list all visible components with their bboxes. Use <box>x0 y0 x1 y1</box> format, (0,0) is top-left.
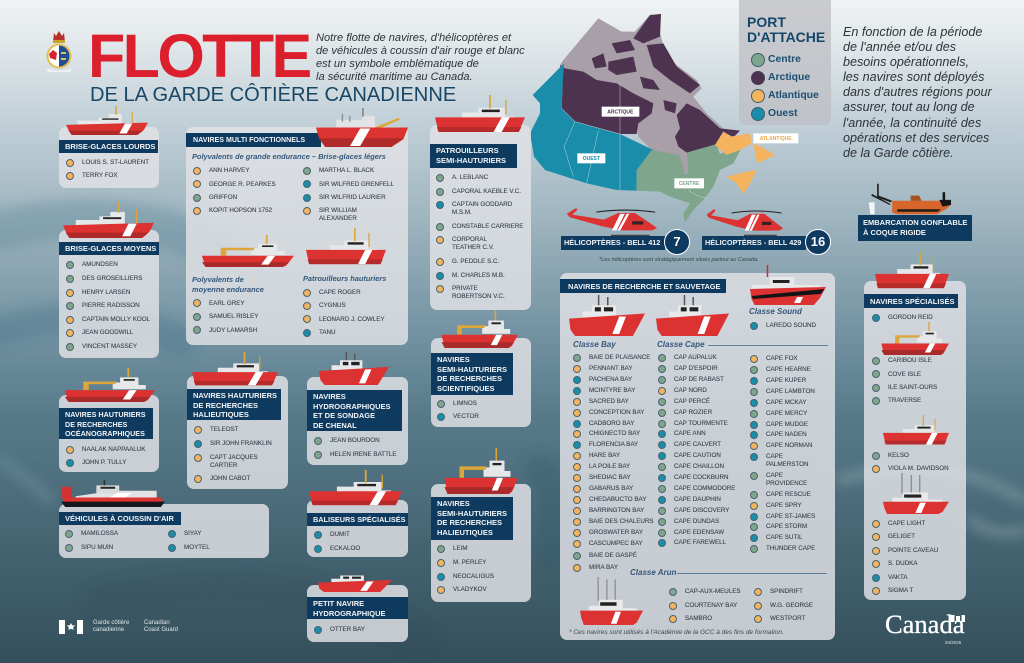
heading <box>186 133 321 147</box>
panel: navires multi fonctionnels: JUDY LAMARSH <box>209 326 257 334</box>
heading <box>864 294 958 308</box>
heading <box>430 144 517 168</box>
panel: navires de recherche et sauvetage: CHIGNECTO BAY <box>589 430 640 437</box>
deployment text: dans d'autres régions pour <box>843 85 992 99</box>
subheading: classe arun: Classe Arun <box>630 568 676 577</box>
panel: navires spécialisés <box>864 281 966 600</box>
panel: navires de recherche et sauvetage: CAPE DISCOVERY <box>674 507 729 514</box>
panel: navires de recherche et sauvetage: CAPE MUDGE <box>766 421 808 428</box>
panel: navires multi fonctionnels: GRIFFON <box>209 194 237 201</box>
panel: navires de recherche et sauvetage: CAPE FOX <box>766 355 798 362</box>
panel: navires hauturiers de recherches halieutiques: SIR JOHN FRANKLIN <box>210 440 272 447</box>
panel: navires de recherche et sauvetage: CAPE DUNDAS <box>674 518 719 525</box>
panel: semi-hauturiers de recherches scientifiques: VECTOR <box>453 413 479 420</box>
panel: patrouilleurs semi-hauturiers: CAPTAIN GODDARD <box>452 201 512 208</box>
panel: navires de recherche et sauvetage: PROVIDENCE <box>766 480 807 487</box>
panel: navires spécialisés: POINTE CAVEAU <box>888 547 938 554</box>
panel: patrouilleurs semi-hauturiers: CORPORAL <box>452 236 487 243</box>
legend item: centre: Centre <box>768 54 801 65</box>
subheading: grande endurance: Polyvalents de grande endurance – Brise-glaces légers <box>192 152 386 161</box>
count: 7 <box>664 229 690 255</box>
panel: navires spécialisés: VIOLA M. DAVIDSON <box>888 465 949 472</box>
heading: HYDROGRAPHIQUE <box>313 609 386 618</box>
panel: patrouilleurs semi-hauturiers: A. LEBLANC <box>452 174 488 181</box>
panel: navires de recherche et sauvetage: CAPE MERCY <box>766 410 807 417</box>
panel: patrouilleurs semi-hauturiers: CAPORAL KAEBLE V.C. <box>452 188 521 195</box>
ship: specialized 4 <box>883 473 949 514</box>
panel: navires de recherche et sauvetage: THUNDER CAPE <box>766 545 815 552</box>
panel: semi-hauturiers de recherches halieutiques: LEIM <box>453 545 468 552</box>
panel: navires multi fonctionnels: ANN HARVEY <box>209 167 250 174</box>
heading: NAVIRES <box>437 355 470 364</box>
label: embarcation gonflable: EMBARCATION GONFLABLE <box>863 218 967 227</box>
ship: scientific research <box>442 310 518 348</box>
footer: coast guard: Coast Guard <box>144 627 178 633</box>
panel: navires multi fonctionnels: LEONARD J. COWLEY <box>319 316 385 322</box>
label: centre: CENTRE <box>679 181 700 187</box>
helicopter footnote: *Les hélicoptères sont stratégiquement situés partout au Canada. <box>599 257 759 263</box>
heading: SEMI-HAUTURIERS <box>437 365 507 374</box>
panel: brise-glaces moyens: HENRY LARSEN <box>82 289 130 296</box>
panel: véhicules à coussin d'air: SIYAY <box>184 530 201 537</box>
panel: navires multi fonctionnels: CYGNUS <box>319 302 346 309</box>
intro text: Notre flotte de navires, d'hélicoptères et <box>316 32 511 44</box>
legend item: arctique <box>751 71 810 85</box>
panel: navires de recherche et sauvetage: CASCUMPEC BAY <box>589 540 643 547</box>
label: ouest: OUEST <box>583 156 600 162</box>
panel: baliseurs spécialisés: DUMIT <box>330 531 350 538</box>
panel: patrouilleurs semi-hauturiers: M.S.M. <box>452 209 472 216</box>
panel: navires spécialisés: COVE ISLE <box>888 370 921 378</box>
panel: patrouilleurs semi-hauturiers: CONSTABLE CARRIERE <box>452 223 523 230</box>
panel: navires hydrographiques <box>307 377 408 465</box>
legend item: arctique: Arctique <box>768 72 810 83</box>
heading: ET DE SONDAGE <box>313 411 375 420</box>
panel: navires spécialisés: S. DUDKA <box>888 560 918 567</box>
panel: navires hauturiers océanographiques: JOHN P. TULLY <box>82 459 126 466</box>
ship: specialized 1 <box>875 252 949 288</box>
panel: baliseurs spécialisés: ECKALOO <box>330 545 360 552</box>
panel: véhicules à coussin d'air: MOYTEL <box>184 544 210 551</box>
ship: hydrographic <box>319 352 389 385</box>
subheading: classe cape: Classe Cape <box>657 340 705 349</box>
panel: petit navire hydrographique <box>307 585 408 642</box>
panel: navires de recherche et sauvetage: FLORENCIA BAY <box>589 441 638 448</box>
ship: bay class <box>569 295 645 336</box>
panel: navires de recherche et sauvetage: CAPE HEARNE <box>766 366 811 373</box>
panel: navires de recherche et sauvetage: CAPE CALVERT <box>674 441 721 448</box>
panel: navires spécialisés: CARIBOU ISLE <box>888 357 932 364</box>
panel: navires multi fonctionnels: SIR WILLIAM <box>319 207 357 214</box>
panel: navires de recherche et sauvetage: CAPE MCKAY <box>766 399 807 406</box>
panel: navires de recherche et sauvetage: CAP DE RABAST <box>674 376 724 383</box>
ship: multi-purpose <box>316 108 408 147</box>
ship: heavy icebreaker <box>66 106 148 135</box>
panel: port d'attache legend <box>739 0 831 125</box>
panel: navires de recherche et sauvetage: COURTENAY BAY <box>685 602 737 609</box>
label: embarcation gonflable <box>858 215 972 241</box>
ship: small hydrographic <box>318 570 392 592</box>
footer: coast guard: Canadian <box>144 620 170 626</box>
panel: navires de recherche et sauvetage: CAPE STORM <box>766 523 807 530</box>
panel: navires de recherche et sauvetage: CADBORO BAY <box>589 420 634 427</box>
panel: navires spécialisés: GELIGET <box>888 533 915 540</box>
panel: navires de recherche et sauvetage: CAP NORD <box>674 387 707 394</box>
panel: patrouilleurs semi-hauturiers: TEATHER C.V. <box>452 244 494 251</box>
legend item: centre <box>751 53 801 67</box>
panel: brise-glaces lourds: LOUIS S. ST-LAURENT <box>82 159 149 166</box>
panel: navires de recherche et sauvetage: CAP AUPALUK <box>674 354 717 361</box>
panel: semi-hauturiers de recherches halieutiques: M. PERLEY <box>453 559 486 566</box>
panel: petit navire hydrographique: OTTER BAY <box>330 626 365 633</box>
heading <box>187 389 281 420</box>
panel: navires spécialisés: KELSO <box>888 452 909 459</box>
panel: navires multi fonctionnels <box>186 127 408 345</box>
label: embarcation gonflable: À COQUE RIGIDE <box>863 228 926 237</box>
heading: BRISE-GLACES LOURDS <box>65 142 155 151</box>
heading: DE RECHERCHES <box>65 420 127 429</box>
panel: semi-hauturiers de recherches scientifiques <box>431 338 531 427</box>
panel: navires de recherche et sauvetage: LAREDO SOUND <box>766 322 816 329</box>
panel: navires spécialisés: CAPE LIGHT <box>888 520 925 527</box>
panel: navires de recherche et sauvetage: CAPE DAUPHIN <box>674 496 721 503</box>
label: atlantique <box>753 133 798 143</box>
subtitle: DE LA GARDE CÔTIÈRE CANADIENNE <box>90 84 456 106</box>
panel: navires hauturiers de recherches halieutiques: CARTIER <box>210 462 237 469</box>
panel: navires de recherche et sauvetage: HARE BAY <box>589 452 620 459</box>
deployment text: les navires sont déployés <box>843 70 984 84</box>
panel: semi-hauturiers de recherches halieutiques <box>431 484 531 602</box>
panel: navires de recherche et sauvetage: PENNANT BAY <box>589 365 633 372</box>
deployment text: de l'année et/ou des <box>843 40 956 54</box>
panel: navires multi fonctionnels: ALEXANDER <box>319 215 357 222</box>
heading <box>307 597 408 619</box>
panel: navires spécialisés: VAKTA <box>888 574 908 581</box>
panel: navires de recherche et sauvetage: LA POILE BAY <box>589 463 630 470</box>
heading <box>307 513 408 526</box>
panel: navires de recherche et sauvetage: GABARUS BAY <box>589 485 633 492</box>
panel: brise-glaces lourds <box>59 127 159 188</box>
panel: baliseurs spécialisés <box>307 500 408 557</box>
ship: specialized 2 <box>881 322 949 355</box>
count: 7: 7 <box>673 234 681 249</box>
panel: brise-glaces moyens: JEAN GOODWILL <box>82 329 133 336</box>
deployment text: assurer, tout au long de <box>843 100 975 114</box>
panel: brise-glaces moyens: DES GROSEILLIERS <box>82 275 142 282</box>
heading: NAVIRES HAUTURIERS <box>65 410 146 419</box>
panel: navires hauturiers de recherches halieutiques: CAPT JACQUES <box>210 454 258 461</box>
deployment text: besoins opérationnels, <box>843 55 969 69</box>
panel: navires de recherche et sauvetage: CHEDABUCTO BAY <box>589 496 646 503</box>
legend item: atlantique <box>751 89 819 103</box>
map of Canada <box>530 14 798 222</box>
heading: NAVIRES <box>313 392 346 401</box>
legend heading: D'ATTACHE <box>747 28 825 44</box>
title: FLOTTE <box>88 22 310 90</box>
heading: DE RECHERCHES <box>437 518 502 527</box>
heading: PATROUILLEURS <box>436 146 499 155</box>
panel: véhicules à coussin d'air: SIPU MUIN <box>81 544 113 551</box>
panel: navires de recherche et sauvetage: CAP TOURMENTE <box>674 420 728 427</box>
panel: navires multi fonctionnels: EARL GREY <box>209 300 245 306</box>
ship: medium icebreaker <box>63 202 154 238</box>
panel: patrouilleurs semi-hauturiers: G. PEDDLE S.C. <box>452 258 499 265</box>
footer: government flag signature <box>59 620 83 634</box>
heading: PETIT NAVIRE <box>313 599 364 608</box>
heading <box>560 279 726 293</box>
panel: navires de recherche et sauvetage: BAIE DES CHALEURS <box>589 518 654 525</box>
ship: hovercraft <box>61 480 165 507</box>
panel: navires de recherche et sauvetage: CAP D'ESPOIR <box>674 365 718 372</box>
panel: navires de recherche et sauvetage: SACRED BAY <box>589 398 629 405</box>
panel: brise-glaces moyens: AMUNDSEN <box>82 261 118 268</box>
ship: semi-offshore fisheries <box>444 448 518 494</box>
panel: navires hauturiers océanographiques <box>59 395 159 472</box>
subheading: patrouilleurs hauturiers: Patrouilleurs hauturiers <box>303 274 386 283</box>
deployment text: de la Garde côtière. <box>843 146 954 160</box>
panel: navires de recherche et sauvetage: BAIE DE PLAISANCE <box>589 354 650 361</box>
panel: navires de recherche et sauvetage: CAPE RESCUE <box>766 491 811 498</box>
panel: navires spécialisés: GORDON REID <box>888 314 933 321</box>
panel: navires de recherche et sauvetage: CAPE NORMAN <box>766 442 813 449</box>
heading <box>59 512 181 525</box>
panel: navires hauturiers de recherches halieutiques <box>187 376 288 489</box>
panel: navires hauturiers de recherches halieutiques: TELEOST <box>210 426 238 433</box>
heading <box>59 408 153 439</box>
panel: navires spécialisés: SIGMA T <box>888 587 913 594</box>
icon: coast guard crest <box>46 31 72 72</box>
deployment text: l'année, la continuité des <box>843 116 981 130</box>
intro text: de véhicules à coussin d'air rouge et blanc <box>316 45 525 57</box>
ship: specialized 3 <box>883 415 949 444</box>
panel: navires multi fonctionnels: SAMUEL RISLEY <box>209 313 258 320</box>
subheading: moyenne endurance: moyenne endurance <box>192 285 264 294</box>
panel: navires de recherche et sauvetage: MCINTYRE BAY <box>589 387 635 394</box>
footer: garde côtière: Garde côtière <box>93 620 129 626</box>
panel: semi-hauturiers de recherches halieutiques: NEOCALIGUS <box>453 573 494 580</box>
panel: navires de recherche et sauvetage: PACHENA BAY <box>589 376 632 383</box>
footer: wordmark flag <box>951 615 965 622</box>
heading: SEMI-HAUTURIERS <box>436 156 506 165</box>
ship: offshore patrol <box>306 228 386 264</box>
panel: navires multi fonctionnels: SIR WILFRID LAURIER <box>319 194 386 201</box>
panel: navires de recherche et sauvetage: CAPE COCKBURN <box>674 474 729 481</box>
heading: DE CHENAL <box>313 421 357 430</box>
ship: sound class <box>750 265 826 305</box>
footer: coast guard <box>144 620 178 633</box>
panel: navires de recherche et sauvetage: CAPE CHAILLON <box>674 463 724 470</box>
panel: navires de recherche et sauvetage: SPINDRIFT <box>770 588 803 595</box>
panel: navires hydrographiques: HELEN IRENE BATTLE <box>330 451 397 458</box>
label: helicopters bell 412: HÉLICOPTÈRES - BELL 412 <box>564 238 660 247</box>
heading <box>307 390 402 431</box>
panel: semi-hauturiers de recherches scientifiques: LIMNOS <box>453 400 477 407</box>
panel: navires de recherche et sauvetage: CAPE SUTIL <box>766 534 802 541</box>
panel: navires de recherche et sauvetage: CAPE KUPER <box>766 377 806 384</box>
heading <box>431 497 513 540</box>
panel: navires de recherche et sauvetage: MIRA BAY <box>589 564 618 571</box>
label: ouest <box>577 153 605 163</box>
panel: navires de recherche et sauvetage: GROSWATER BAY <box>589 529 643 536</box>
heading: DE RECHERCHES <box>437 374 502 383</box>
legend item: ouest: Ouest <box>768 108 797 119</box>
label: arctique: ARCTIQUE <box>607 109 634 115</box>
heading: HALIEUTIQUES <box>437 528 493 537</box>
panel: navires de recherche et sauvetage: CAPE NADEN <box>766 431 807 438</box>
heading: BRISE-GLACES MOYENS <box>65 244 156 253</box>
label: helicopters bell 429: HÉLICOPTÈRES - BELL 429 <box>705 238 801 247</box>
panel: navires hydrographiques: JEAN BOURDON <box>330 437 380 444</box>
label: helicopters bell 429 <box>702 236 806 250</box>
ship: medium endurance <box>202 235 294 267</box>
heading: NAVIRES SPÉCIALISÉS <box>870 296 954 306</box>
heading: OCÉANOGRAPHIQUES <box>65 429 145 438</box>
panel: semi-hauturiers de recherches halieutiques: VLADYKOV <box>453 586 487 593</box>
panel: navires spécialisés: ILE SAINT-OURS <box>888 384 937 391</box>
ship: oceanographic <box>64 368 155 402</box>
subheading: moyenne endurance <box>192 275 264 294</box>
panel: navires de recherche et sauvetage: WESTPORT <box>770 615 805 622</box>
ship: cape class <box>656 295 729 336</box>
footer: canada wordmark: Canada <box>885 609 964 639</box>
panel: navires de recherche et sauvetage: CAPE <box>766 472 783 479</box>
heading: VÉHICULES À COUSSIN D'AIR <box>65 514 174 523</box>
panel: brise-glaces moyens: CAPTAIN MOLLY KOOL <box>82 316 150 323</box>
legend heading: PORT <box>747 14 786 30</box>
legend item: atlantique: Atlantique <box>768 90 819 101</box>
panel: patrouilleurs semi-hauturiers: M. CHARLES M.B. <box>452 272 505 279</box>
deployment text: En fonction de la période <box>843 25 982 39</box>
label: atlantique: ATLANTIQUE <box>760 136 792 142</box>
ship: buoy tender <box>309 470 402 506</box>
panel: navires de recherche et sauvetage: BARRINGTON BAY <box>589 507 644 514</box>
panel: brise-glaces moyens <box>59 230 159 358</box>
panel: navires hauturiers océanographiques: NAALAK NAPPAALUK <box>82 446 145 453</box>
panel: navires de recherche et sauvetage: CAPE FAREWELL <box>674 539 726 546</box>
intro text: la sécurité maritime au Canada. <box>316 71 473 83</box>
legend item: ouest <box>751 107 798 121</box>
panel: patrouilleurs semi-hauturiers: PRIVATE <box>452 285 478 292</box>
intro text: est un symbole emblématique de <box>316 58 479 70</box>
heading <box>431 353 513 395</box>
panel: navires de recherche et sauvetage: PALMERSTON <box>766 461 808 468</box>
count: 16 <box>805 229 831 255</box>
panel: brise-glaces lourds: TERRY FOX <box>82 172 118 179</box>
ship: semi-offshore patrol <box>435 95 525 132</box>
heading: NAVIRES <box>437 499 470 508</box>
panel: patrouilleurs semi-hauturiers: ROBERTSON V.C. <box>452 293 505 300</box>
heading: NAVIRES MULTI FONCTIONNELS <box>193 136 305 144</box>
heading: DE RECHERCHES <box>193 401 258 410</box>
panel: navires de recherche et sauvetage: CAP PERCÉ <box>674 398 710 405</box>
panel: brise-glaces moyens: VINCENT MASSEY <box>82 343 137 350</box>
footer: garde côtière: canadienne <box>93 627 124 633</box>
panel: navires multi fonctionnels: TANU <box>319 329 336 336</box>
panel: navires de recherche et sauvetage: CAPE SPRY <box>766 502 802 509</box>
intro text <box>316 32 525 83</box>
icon: helicopter bell 412 <box>566 208 657 236</box>
panel: navires de recherche et sauvetage: SHEDIAC BAY <box>589 474 631 481</box>
panel: navires de recherche et sauvetage: CAP-AUX-MEULES <box>685 588 741 595</box>
panel: navires multi fonctionnels: SIR WILFRED GRENFELL <box>319 180 394 188</box>
panel: navires de recherche et sauvetage: W.G. GEORGE <box>770 602 813 609</box>
panel: brise-glaces moyens: PIERRE RADISSON <box>82 302 140 309</box>
label: arctique <box>602 107 639 117</box>
heading: SCIENTIFIQUES <box>437 384 495 393</box>
panel: navires spécialisés: TRAVERSE <box>888 397 921 404</box>
panel: navires de recherche et sauvetage <box>560 273 835 640</box>
label: helicopters bell 412 <box>561 236 665 250</box>
heading: BALISEURS SPÉCIALISÉS <box>313 515 405 524</box>
panel: navires de recherche et sauvetage: CAPE COMMODORE <box>674 485 735 492</box>
heading <box>59 140 158 153</box>
panel: navires de recherche et sauvetage: CAPE EDENSAW <box>674 529 724 536</box>
heading: HYDROGRAPHIQUES <box>313 402 391 411</box>
ship: fisheries research <box>192 352 278 386</box>
icon: helicopter bell 429 <box>706 209 783 236</box>
footer: garde côtière <box>93 620 130 633</box>
panel: navires multi fonctionnels: CAPE ROGER <box>319 289 361 296</box>
subheading: classe sound: Classe Sound <box>749 307 802 316</box>
subheading: classe bay: Classe Bay <box>573 340 616 349</box>
panel: navires de recherche et sauvetage: CAPE LAMBTON <box>766 388 815 395</box>
panel: navires multi fonctionnels: KOPIT HOPSON 1752 <box>209 207 272 214</box>
heading: NAVIRES DE RECHERCHE ET SAUVETAGE <box>568 282 720 290</box>
panel: navires multi fonctionnels: MARTHA L. BLACK <box>319 167 374 174</box>
deployment text: opérations et des services <box>843 131 989 145</box>
subheading: moyenne endurance: Polyvalents de <box>192 275 244 284</box>
panel: patrouilleurs semi-hauturiers <box>430 125 531 310</box>
panel: navires hauturiers de recherches halieutiques: JOHN CABOT <box>210 475 250 482</box>
icon: inflatable boat <box>868 184 951 214</box>
training footnote: * Ces navires sont utilisés à l'Académie de la GCC à des fins de formation. <box>569 629 784 636</box>
panel: navires de recherche et sauvetage: CAP ROZIER <box>674 409 712 416</box>
ship: arun class <box>580 577 643 625</box>
panel: navires de recherche et sauvetage: CAPE <box>766 453 783 460</box>
heading: NAVIRES HAUTURIERS <box>193 391 277 400</box>
heading: SEMI-HAUTURIERS <box>437 509 507 518</box>
panel: véhicules à coussin d'air <box>59 504 269 558</box>
panel: navires de recherche et sauvetage: BAIE DE GASPÉ <box>589 552 637 559</box>
heading: HALIEUTIQUES <box>193 410 249 419</box>
panel: navires de recherche et sauvetage: CAPE ANN <box>674 430 706 437</box>
footer: date: 04/2026 <box>945 640 961 645</box>
panel: navires de recherche et sauvetage: CAPE ST-JAMES <box>766 513 815 520</box>
panel: navires de recherche et sauvetage: SAMBRO <box>685 615 712 622</box>
count: 16: 16 <box>811 234 825 249</box>
panel: navires multi fonctionnels: GEORGE R. PEARKES <box>209 180 276 188</box>
panel: navires de recherche et sauvetage: CONCEPTION BAY <box>589 409 644 416</box>
panel: navires de recherche et sauvetage: CAPE CAUTION <box>674 452 721 459</box>
label: centre <box>674 178 704 188</box>
legend heading <box>747 14 825 44</box>
heading <box>59 242 159 255</box>
deployment text <box>843 25 992 160</box>
panel: véhicules à coussin d'air: MAMILOSSA <box>81 530 118 537</box>
